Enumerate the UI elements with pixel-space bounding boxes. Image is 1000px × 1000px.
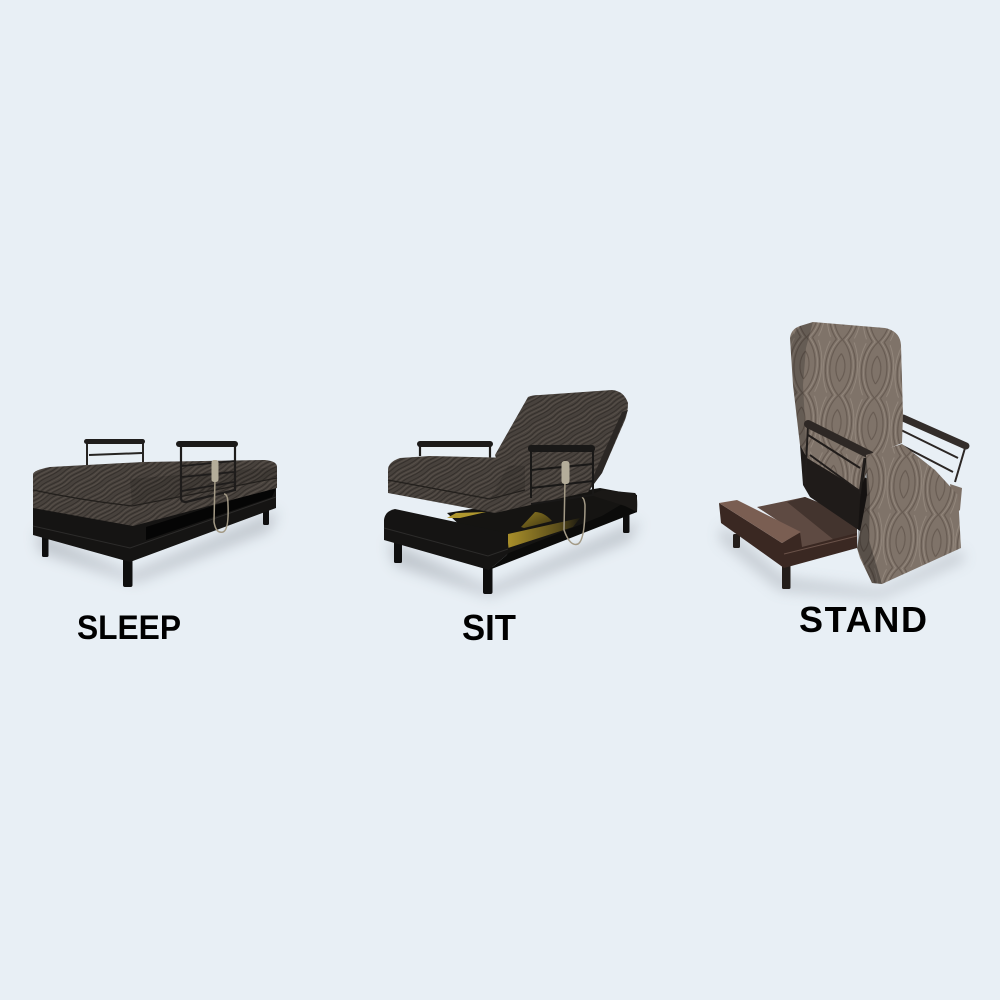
- near rail: [805, 424, 870, 494]
- lower mattress: [33, 474, 277, 526]
- upper seat cushion: [388, 456, 525, 499]
- legs: [733, 534, 790, 589]
- hand control and cord: [562, 461, 585, 544]
- rear deck: [447, 488, 637, 556]
- heading: sit: SIT: [462, 607, 516, 648]
- footboard top: [719, 500, 801, 543]
- near rail: [528, 445, 595, 504]
- upper mattress: [33, 460, 277, 506]
- frame underside: [800, 445, 870, 535]
- draped leg rest: [857, 444, 961, 584]
- glowing under-bed light: [508, 518, 580, 548]
- product: sit position bed: [384, 390, 640, 596]
- shadow under stand bed: [720, 525, 965, 598]
- heading: sleep: SLEEP: [77, 609, 181, 647]
- footboard assembly: [719, 497, 857, 568]
- product: sleep position bed: [33, 439, 278, 587]
- footboard front: [719, 503, 857, 568]
- near rail: [176, 441, 238, 502]
- footboard deck: [757, 497, 857, 549]
- lower seat layer: [388, 476, 592, 513]
- tall backrest: [790, 322, 903, 490]
- hand control and cord: [212, 460, 228, 532]
- far rail: [417, 441, 493, 458]
- shadow under sleep bed: [36, 510, 278, 582]
- far side cushion: [950, 484, 962, 515]
- mattress: [33, 460, 277, 526]
- raised backrest: [495, 390, 628, 500]
- legs: [394, 512, 630, 594]
- shadow under sit bed: [388, 520, 640, 596]
- heading: stand: STAND: [799, 599, 927, 640]
- product: stand position bed: [719, 322, 966, 598]
- far rail: [901, 418, 966, 482]
- bed base: [33, 478, 276, 562]
- bed base: [384, 509, 509, 570]
- legs: [42, 505, 269, 587]
- far rail: [84, 439, 145, 465]
